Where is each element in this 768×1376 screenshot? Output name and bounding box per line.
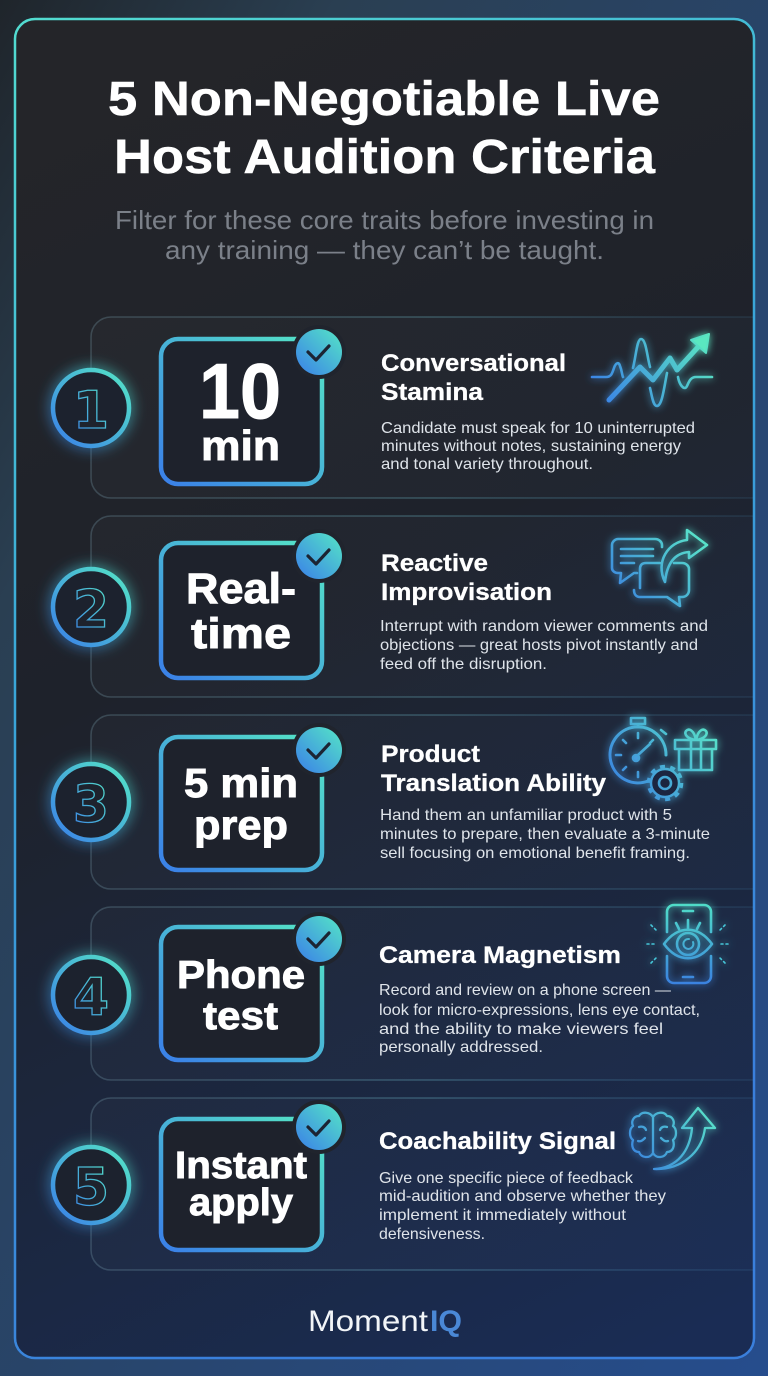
number badge 5 [53,1147,129,1223]
number badge 2: 2 [73,580,109,640]
description [380,807,710,862]
panel: criterion 2 [53,516,768,697]
title: 5 Non-Negotiable Live [108,73,660,126]
card 3 background [91,715,768,889]
heading: Translation Ability [381,770,607,797]
stat box: Instant apply: apply [189,1182,293,1224]
heading [381,350,566,406]
number badge 1 [53,370,129,446]
description: minutes to prepare, then evaluate a 3-minute [380,826,710,843]
icon: phone with eye [647,905,730,983]
card 2 background [91,516,768,697]
icon: brain with up arrow [630,1108,715,1169]
check badge [292,325,346,379]
stat box: 10 min: 10 [199,347,281,435]
stat box: Phone test: Phone [177,954,305,997]
number badge 4: 4 [73,968,109,1028]
panel: criterion 1 [53,317,768,498]
heading: Coachability Signal [379,1128,616,1155]
description [381,420,695,473]
check badge [292,912,346,966]
logo: MomentIQ: Moment [308,1305,429,1338]
heading: Improvisation [381,579,552,606]
stat box: 5 min prep: prep [194,802,288,848]
description: Give one specific piece of feedback [379,1170,634,1187]
description: minutes without notes, sustaining energy [381,438,681,455]
number badge 5: 5 [73,1158,109,1218]
logo: MomentIQ: IQ [430,1305,462,1338]
panel: criterion 3 [53,715,768,889]
check badge [292,1100,346,1154]
description: sell focusing on emotional benefit framing. [380,845,690,862]
heading: Camera Magnetism [379,942,621,969]
subtitle: any training — they can’t be taught. [165,235,604,265]
heading: Stamina [381,379,484,406]
title [108,73,660,184]
icon: stopwatch, gear and gift [610,718,716,800]
card 1 background [91,317,768,498]
heading [381,741,607,797]
description [380,618,708,673]
number badge 3: 3 [73,775,109,835]
icon: chat bubbles with share arrow [612,530,707,606]
description: feed off the disruption. [380,656,547,673]
check badge [292,529,346,583]
heading [381,550,552,606]
heading: Conversational [381,350,566,377]
description: Record and review on a phone screen — [379,982,671,999]
stat box: Real-time: Real- [186,565,296,613]
description: defensiveness. [379,1226,485,1243]
number badge 1: 1 [73,381,109,441]
panel: criterion 4 [53,905,768,1080]
check badge [292,723,346,777]
card 5 background [91,1098,768,1270]
title: Host Audition Criteria [114,131,655,184]
subtitle: Filter for these core traits before investing in [115,205,654,235]
panel: criterion 5 [53,1098,768,1270]
stat box: Phone test: test [203,995,278,1038]
description: personally addressed. [379,1039,543,1056]
stat box: 10 min [161,339,322,484]
heading: Product [381,741,480,768]
stat box: 5 min prep: 5 min [184,760,298,806]
description: Interrupt with random viewer comments and [380,618,708,635]
description: look for micro-expressions, lens eye contact, [379,1002,700,1019]
stat box: Real-time: time [191,610,291,658]
description [379,982,700,1056]
icon: rising pulse chart [592,334,712,406]
stat box: 5 min prep [161,737,322,870]
description: Candidate must speak for 10 uninterrupted [381,420,695,437]
stat box: 10 min: min [201,422,280,469]
stat box: Instant apply: Instant [175,1145,307,1187]
stat box: Real-time [161,543,322,678]
description [379,1170,666,1243]
number badge 4 [53,957,129,1033]
heading: Reactive [381,550,488,577]
description: objections — great hosts pivot instantly and [380,637,698,654]
description: Hand them an unfamiliar product with 5 [380,807,672,824]
description: implement it immediately without [379,1207,627,1224]
description: and the ability to make viewers feel [379,1021,663,1038]
description: and tonal variety throughout. [381,456,593,473]
description: mid-audition and observe whether they [379,1188,666,1205]
stat box: Phone test [161,927,322,1060]
stat box: Instant apply [161,1119,322,1250]
number badge 3 [53,764,129,840]
card 4 background [91,907,768,1080]
number badge 2 [53,569,129,645]
subtitle [115,205,654,265]
